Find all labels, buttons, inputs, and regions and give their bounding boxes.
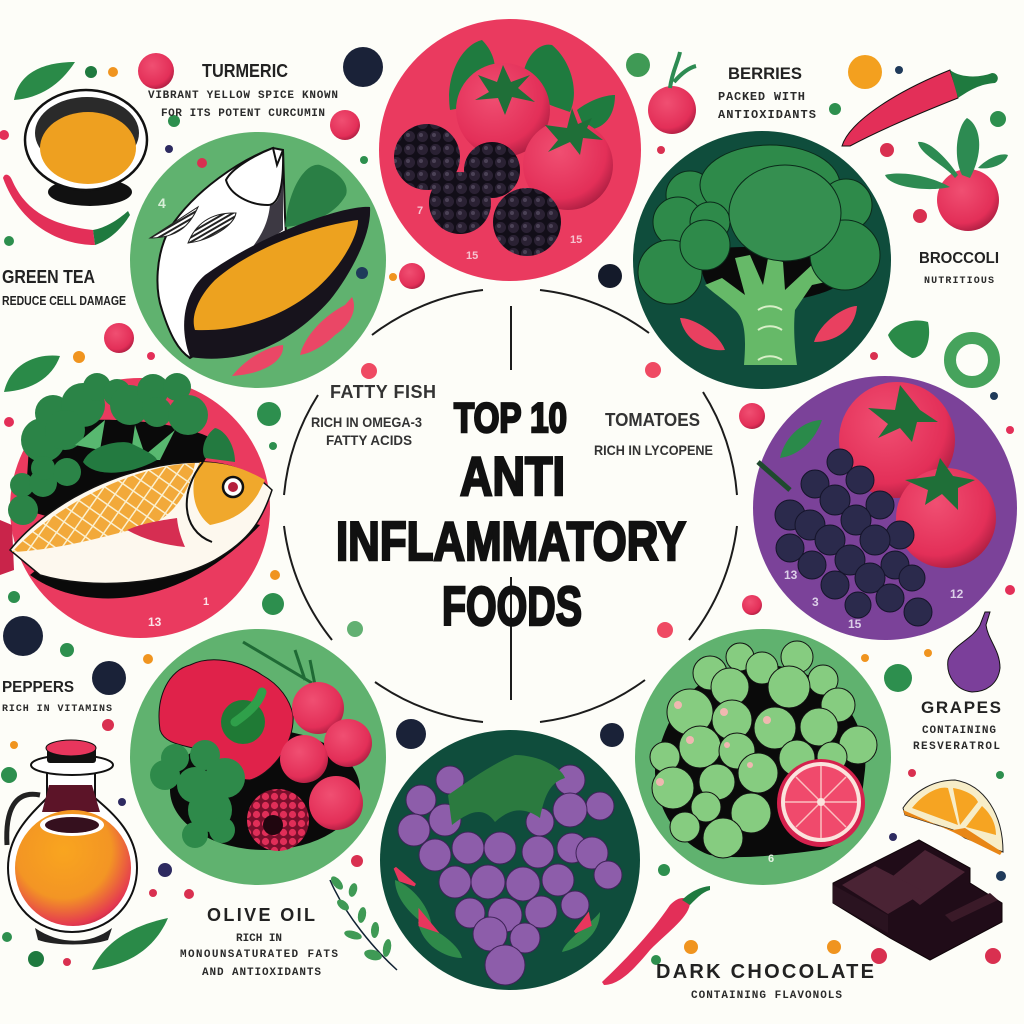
label: grapes: GRAPES bbox=[921, 698, 1001, 717]
icon: green ring bbox=[950, 338, 994, 382]
label: grapes bbox=[913, 698, 1001, 753]
label: dark chocolate: DARK CHOCOLATE bbox=[656, 961, 874, 983]
icon: red chili upper right bbox=[842, 70, 998, 146]
label: peppers: RICH IN VITAMINS bbox=[2, 704, 112, 715]
label: tomatoes: TOMATOES bbox=[605, 410, 700, 430]
label: peppers: PEPPERS bbox=[2, 679, 74, 696]
label: fatty fish: RICH IN OMEGA-3 bbox=[311, 414, 422, 430]
label: olive oil: MONOUNSATURATED FATS bbox=[180, 949, 338, 961]
label: green tea: GREEN TEA bbox=[2, 267, 95, 287]
panel: berries and tomatoes on red: 15 bbox=[570, 234, 582, 246]
panel: purple grapes on dark green bbox=[380, 730, 640, 990]
panel: fish and broccoli on red bbox=[0, 373, 272, 638]
label: green tea: REDUCE CELL DAMAGE bbox=[2, 293, 126, 308]
label: fatty fish: FATTY ACIDS bbox=[326, 432, 412, 448]
panel: fish and broccoli on red: 13 bbox=[148, 615, 162, 629]
icon: dark chocolate bbox=[833, 840, 1002, 960]
label: olive oil: RICH IN bbox=[236, 933, 282, 945]
panel: peppers and berries on green bbox=[130, 629, 386, 885]
label: fatty fish: FATTY FISH bbox=[330, 382, 436, 402]
panel: green peas and grapefruit bbox=[635, 629, 891, 885]
label: dark chocolate: CONTAINING FLAVONOLS bbox=[691, 990, 842, 1002]
icon: fig bbox=[948, 612, 1000, 692]
panel: broccoli on dark green bbox=[633, 131, 891, 389]
panel: grapes and tomatoes on purple: 15 bbox=[848, 617, 862, 631]
panel: berries and tomatoes on red bbox=[379, 19, 641, 281]
label: peppers bbox=[2, 679, 112, 715]
panel: grapes and tomatoes on purple: 3 bbox=[812, 595, 819, 609]
title: FOODS bbox=[442, 575, 582, 637]
label: fatty fish bbox=[311, 382, 436, 448]
label: green tea bbox=[2, 267, 126, 308]
label: grapes: RESVERATROL bbox=[913, 741, 1000, 753]
panel: berries and tomatoes on red: 15 bbox=[466, 250, 478, 262]
center ring of arcs and lines bbox=[284, 290, 737, 722]
title: TOP 10 bbox=[454, 394, 567, 441]
panel: turmeric and fish on green bbox=[130, 132, 386, 388]
title bbox=[336, 394, 686, 637]
label: dark chocolate bbox=[656, 961, 874, 1002]
panel: fish and broccoli on red: 1 bbox=[203, 596, 209, 608]
label: berries bbox=[718, 64, 816, 122]
panel: turmeric and fish on green: 4 bbox=[158, 195, 166, 211]
icon: red chili left bbox=[3, 175, 130, 245]
label: turmeric: FOR ITS POTENT CURCUMIN bbox=[161, 108, 325, 120]
icon: radish with leaves bbox=[885, 118, 1008, 231]
label: olive oil bbox=[180, 905, 338, 979]
icons: herb sprig bbox=[329, 874, 397, 970]
fins bbox=[150, 207, 236, 243]
icon: olive oil bottle bbox=[7, 740, 137, 944]
label: tomatoes bbox=[594, 410, 713, 458]
label: broccoli bbox=[919, 250, 999, 287]
label: berries: ANTIOXIDANTS bbox=[718, 108, 816, 122]
icon: turmeric bowl bbox=[25, 90, 147, 206]
label: broccoli: BROCCOLI bbox=[919, 250, 999, 267]
leaf bbox=[285, 165, 347, 227]
label: grapes: CONTAINING bbox=[922, 725, 996, 737]
panel: green peas and grapefruit: 6 bbox=[768, 853, 774, 865]
label: turmeric: VIBRANT YELLOW SPICE KNOWN bbox=[148, 90, 338, 102]
label: olive oil: AND ANTIOXIDANTS bbox=[202, 967, 321, 979]
label: olive oil: OLIVE OIL bbox=[207, 905, 315, 925]
label: turmeric bbox=[148, 61, 338, 120]
panel: grapes and tomatoes on purple bbox=[753, 376, 1017, 640]
label: turmeric: TURMERIC bbox=[202, 61, 288, 81]
grapefruit bbox=[777, 759, 865, 847]
dish bbox=[184, 207, 370, 359]
label: berries: BERRIES bbox=[728, 64, 802, 83]
title: INFLAMMATORY bbox=[336, 510, 686, 572]
icon: red chili bottom bbox=[602, 886, 710, 985]
label: berries: PACKED WITH bbox=[718, 90, 805, 104]
icon: orange slice bbox=[903, 780, 1003, 855]
icon: small radish bbox=[648, 52, 696, 134]
panel: berries and tomatoes on red: 7 bbox=[417, 205, 423, 217]
title: ANTI bbox=[460, 445, 565, 507]
panel: grapes and tomatoes on purple: 13 bbox=[784, 568, 798, 582]
label: tomatoes: RICH IN LYCOPENE bbox=[594, 442, 713, 458]
panel: grapes and tomatoes on purple: 12 bbox=[950, 587, 964, 601]
label: broccoli: NUTRITIOUS bbox=[924, 276, 994, 287]
